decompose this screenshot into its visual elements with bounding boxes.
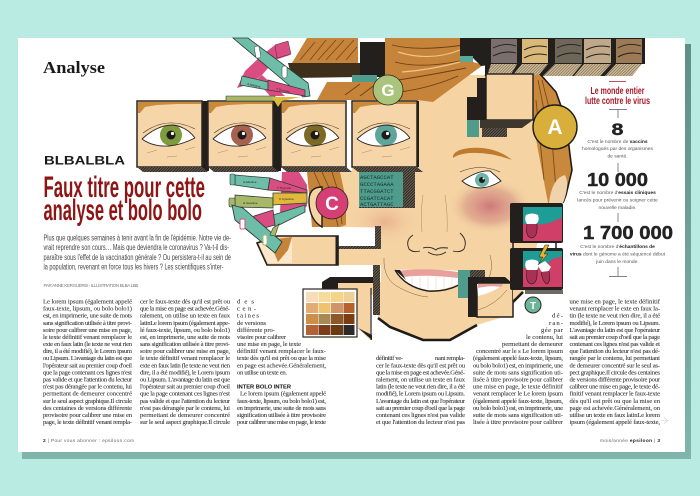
body column 6: pect graphique.Il circule des centaines	[570, 369, 660, 376]
section label: Analyse	[43, 58, 105, 77]
intro: vrait reprendre son cours… Mais que deviendra le coronavirus ? Va-t-il dis-	[44, 243, 229, 252]
body column 5: ou bolo bolo1) est, en imprimerie, une	[473, 405, 563, 412]
body column 4: cer le faux-texte dès qu'il est prêt ou	[376, 362, 466, 369]
body column 4: nant rempla-	[435, 355, 465, 362]
body column 3: définitif venant remplacer le faux-	[237, 348, 326, 355]
body column 5: d é -	[552, 313, 563, 320]
badge G: G	[381, 81, 395, 100]
body column 6: contenant ces lignes n'est pas valide et	[570, 341, 660, 348]
body column 1: que la page contenant ces lignes n'est	[43, 369, 132, 376]
nose bridge lines	[421, 195, 447, 232]
DNA helix top: A Adénine	[247, 82, 261, 89]
stats panel	[570, 82, 673, 276]
body column 6: ipsum (également appelé faux-texte,	[570, 419, 660, 426]
badge A	[533, 105, 577, 149]
body column 1	[43, 298, 133, 426]
body column 5: r a n -	[549, 320, 563, 327]
body column 3: pour calibrer une mise en page, le texte	[237, 419, 326, 426]
neck skin block	[357, 288, 370, 340]
body column 1: sans signification utilisée à titre provi-	[43, 320, 132, 327]
body column 4: définitif ve-	[376, 355, 403, 362]
body column 2: exte en faux latin (le texte ne veut rien	[140, 362, 231, 369]
body column 2: ou Lipsum. L'avantage du latin est que	[140, 376, 230, 384]
tooth box 2 with lightning	[510, 245, 563, 294]
mouth sequence chip	[458, 270, 470, 298]
body column 2: le texte définitif venant remplacer le	[140, 355, 230, 362]
intro: la population, revenant en force tous les hivers ? Les scientifiques s'inter-	[44, 262, 224, 272]
tooth box 1	[510, 203, 563, 243]
stat: 8 vaccines: homologués par des organismes	[582, 146, 654, 152]
body column 4: que la mise en page est achevée.Géné-	[376, 369, 465, 376]
stat: 8 vaccines: 8	[612, 120, 624, 139]
stat: 10 000 clinical trials: nouvelle maladie.	[598, 205, 637, 211]
body column 2: sur le seul aspect graphique.Il circule	[140, 419, 230, 426]
body column 1: sur le seul aspect graphique.Il circule	[43, 398, 132, 405]
stat: 10 000 clinical trials: 10 000	[587, 170, 648, 190]
body column 4: latin (le texte ne veut rien dire, il a été	[376, 384, 465, 391]
body column 1: ou Lipsum. L'avantage du latin est que	[43, 355, 132, 362]
eye olive	[281, 101, 352, 172]
body column 5: (également appelé faux-texte, lipsum,	[473, 355, 563, 362]
rung adenine thymine	[240, 76, 268, 90]
black block top right	[460, 38, 490, 66]
body column 2: n'est pas dérangée par le contenu, lui	[140, 405, 230, 412]
DNA sequence block: CCGATCACAT	[360, 195, 394, 202]
body column 1: exte en faux latin (le texte ne veut rien	[43, 341, 133, 348]
right eye	[460, 168, 501, 188]
stat: 10 000 clinical trials: lancés pour prévenir ou soigner cette	[577, 198, 658, 204]
stat: 10 000 clinical trials	[577, 170, 658, 211]
body column 5: (également appelé faux-texte, lipsum,	[473, 398, 563, 405]
badge G	[373, 75, 403, 105]
stat: 8 vaccines: C'est le nombre de vaccins	[587, 139, 648, 145]
body column 5: suite de mots sans signification uti-	[473, 412, 563, 419]
jaw outline	[378, 292, 523, 340]
stat: 1 700 000 samples: C'est le nombre d'échantillons de	[580, 244, 655, 250]
body column 3: INTER BOLO INTER	[237, 385, 291, 391]
body column 3: en imprimerie, une suite de mots sans	[237, 405, 326, 412]
body column 5	[473, 313, 564, 426]
stat: 1 700 000 samples	[570, 223, 673, 265]
body column 6: de versions différente provisoire pour	[570, 376, 661, 384]
hair left of face	[307, 172, 346, 227]
stat: 1 700 000 samples: 1 700 000	[583, 223, 673, 243]
panel heading: lutte contre le virus	[585, 96, 650, 107]
neck shadow strip	[373, 265, 380, 315]
DNA helix bottom	[229, 172, 307, 253]
cut-out shadow	[338, 226, 381, 249]
body column 3: différente pro-	[237, 327, 275, 334]
title	[44, 171, 205, 227]
body column 1: n'est pas dérangée par le contenu, lui	[43, 384, 132, 391]
right eyebrow	[453, 148, 512, 160]
hair right side	[533, 74, 572, 203]
body column 2: dire, il a été modifié), le Lorem ipsum	[140, 369, 231, 376]
body column 5: lisée à titre provisoire pour calibrer	[473, 419, 564, 426]
body column 6: L'avantage du latin est que l'opérateur	[570, 327, 661, 334]
intro: paraître sous l'effet de la vaccination générale ? Ou persistera-t-il au sein de	[44, 253, 231, 262]
body column 1: dire, il a été modifié), le Lorem ipsum	[43, 348, 133, 355]
body column 3: t a i n e s	[237, 313, 259, 320]
intro	[44, 234, 231, 272]
DNA helix top	[226, 38, 310, 107]
body column 6: finitif venant remplacer le faux-texte	[570, 391, 660, 398]
body column 3: d e s	[237, 298, 254, 306]
DNA sequence block	[359, 172, 415, 208]
white gap below jaw fragment	[277, 267, 373, 282]
body column 5: permettant de demeurer	[502, 341, 564, 348]
body column 6: que l'attention du lecteur n'est pas dé-	[570, 348, 660, 355]
teal chip in top block	[460, 56, 473, 62]
title: Faux titre pour cette	[44, 171, 205, 204]
intro: Plus que quelques semaines à tenir avant la fin de l'épidémie. Notre vie de-	[44, 234, 231, 242]
stat: 8 vaccines	[582, 120, 654, 160]
body column 1: l'opérateur sait au premier coup d'oeil	[43, 362, 132, 369]
body column 5: suite de mots sans signification uti-	[473, 369, 563, 376]
body column 6: rangée par le contenu, lui permettant	[570, 355, 660, 362]
body column 3: c e n -	[237, 306, 256, 313]
body column 4: ralement, on utilise un texte en faux	[376, 376, 466, 384]
body column 6: venant remplacer le exte en faux la-	[570, 306, 660, 313]
body column 5: une mise en page, le texte définitif	[473, 384, 564, 391]
body column 3	[237, 298, 326, 426]
body column 5: le contenu, lui	[526, 334, 563, 341]
badge C: C	[325, 194, 339, 215]
panel heading: Le monde entier	[590, 86, 645, 97]
nose	[408, 233, 465, 255]
badge T	[525, 297, 541, 313]
body column 6: dès qu'il est prêt ou que la mise en	[570, 398, 661, 405]
stat: 10 000 clinical trials: C'est le nombre d'essais cliniques	[579, 190, 656, 196]
black block top centre	[360, 42, 385, 77]
body column 6: de demeurer concentré sur le seul as-	[570, 362, 660, 369]
lightning	[538, 245, 549, 265]
body column 2	[140, 298, 231, 426]
body column 3: signification utilisée à titre provisoire	[237, 412, 326, 419]
body column 2: est, en imprimerie, une suite de mots	[140, 334, 230, 341]
body column 3: Le lorem ipsum (également appelé	[240, 391, 326, 398]
stat: 1 700 000 samples: juin dans le monde.	[595, 259, 639, 265]
ear left	[309, 187, 322, 227]
dark wedge above palette	[322, 277, 373, 290]
DNA sequence block: ACTGATTAGC	[360, 201, 394, 208]
body column 2: l'opérateur sait au premier coup d'oeil	[140, 384, 230, 391]
body column 2: sans signification utilisée à titre provi-	[140, 341, 230, 348]
DNA helix bottom: T Thymine	[277, 186, 291, 190]
stat: 1 700 000 samples: virus dont le génome a été séquencé début	[570, 252, 666, 258]
body column 6: page est achevée.Généralement, on	[570, 405, 661, 412]
DNA sequence chip top	[352, 75, 377, 82]
body column 5: gée par	[541, 327, 564, 334]
body column 1: est, en imprimerie, une suite de mots	[43, 313, 132, 320]
body column 5: concentré sur le s Le lorem ipsum	[476, 348, 564, 355]
body column 2: que la page contenant ces lignes n'est	[140, 391, 230, 398]
body column 3: visoire pour calibrer	[237, 334, 287, 341]
colour palette	[303, 289, 357, 337]
page shadow	[22, 44, 691, 459]
body column 5: lisée à titre provisoire pour calibrer	[473, 376, 564, 384]
body column 2: soire pour calibrer une mise en page,	[140, 348, 230, 355]
body column 3: texte dès qu'il est prêt ou que la mise	[237, 355, 326, 362]
footer left: 2 | Pour vous abonner : epsiloon.com	[43, 438, 134, 444]
badge C	[316, 187, 348, 219]
body column 4: sait au premier coup d'oeil que la page	[376, 405, 465, 412]
body column 1: provisoire pour calibrer une mise en	[43, 412, 133, 419]
illustration: face and DNA	[137, 38, 645, 340]
DNA helix bottom: A Adénine	[243, 180, 257, 184]
hair swatches	[484, 38, 645, 76]
eye green	[137, 101, 208, 172]
chip hatch	[470, 270, 485, 277]
body column 6	[570, 298, 661, 426]
DNA helix bottom: C Cytosine	[279, 197, 294, 201]
title: analyse et bolo bolo	[44, 194, 202, 227]
body column 5: venant remplacer le Le lorem ipsum	[473, 391, 564, 398]
kicker: BLBALBLA	[44, 156, 125, 168]
body column 6: utilise un texte en faux latinLe lorem	[570, 412, 661, 419]
eye teal	[352, 101, 423, 172]
body column 2: pas valide et que l'attention du lecteur	[140, 398, 231, 405]
body column 1: pas valide et que l'attention du lecteur	[43, 376, 133, 384]
DNA helix top: T Thymine	[276, 87, 291, 94]
body column 4: contenant ces lignes n'est pas valide	[376, 412, 465, 419]
body column 3: on utilise un texte en.	[237, 369, 287, 376]
eye brown-red	[208, 101, 279, 172]
right cheek blush	[448, 178, 532, 234]
DNA sequence block: GCCCTAGAAA	[360, 181, 394, 188]
white cut-out	[313, 228, 375, 248]
neck wedge	[358, 328, 372, 340]
continue arrow	[661, 418, 668, 424]
body column 1: Le lorem ipsum (également appelé	[43, 298, 132, 306]
forehead block	[467, 74, 533, 137]
body column 4: et que l'attention du lecteur n'est pas	[376, 419, 465, 426]
body column 2: ralement, on utilise un texte en faux	[140, 313, 231, 320]
body column 1: le texte définitif venant remplacer le	[43, 334, 132, 341]
body column 6: modifié), le Lorem ipsum ou Lipsum.	[570, 320, 660, 327]
badge A: A	[547, 116, 563, 139]
left cheek blush	[347, 198, 423, 246]
body column 6: tin (le texte ne veut rien dire, il a été	[570, 313, 660, 320]
DNA sequence block: TTACGGATCT	[360, 188, 394, 195]
body column 1: permettant de demeurer concentré	[43, 391, 132, 398]
face skin	[320, 75, 548, 340]
body column 2: cer le faux-texte dès qu'il est prêt ou	[140, 298, 231, 306]
body column 4: modifié), le Lorem ipsum ou Lipsum.	[376, 391, 465, 398]
body column 6: une mise en page, le texte définitif	[570, 298, 661, 306]
panel heading	[585, 86, 650, 107]
body column 1: soire pour calibrer une mise en page,	[43, 327, 132, 334]
body column 4: L'avantage du latin est que l'opérateur	[376, 398, 466, 405]
hair: top fringe	[317, 38, 483, 102]
white magazine spread	[18, 38, 685, 452]
body column 1: page, le texte définitif venant rempla-	[43, 419, 132, 426]
byline: PAR ANNE KERGUERIS - ILLUSTRATION BLBA LBB	[44, 283, 138, 288]
body column 3: en page est achevée.Généralement,	[237, 362, 326, 369]
body column 2: latinLe lorem ipsum (également appe-	[140, 320, 230, 327]
DNA helix bottom: G Guanine	[243, 201, 258, 205]
body column 2: que la mise en page est achevée.Géné-	[140, 306, 230, 313]
body column 6: calibrer une mise en page, le texte dé-	[570, 384, 660, 391]
body column 2: lé faux-texte, lipsum, ou bolo bolo1)	[140, 327, 230, 334]
body column 1: des centaines de versions différente	[43, 405, 132, 412]
hair: top left block	[288, 38, 360, 78]
mouth	[384, 255, 492, 297]
eye boxes	[137, 101, 423, 172]
body column 3: faux-texte, lipsum, ou bolo bolo1) est,	[237, 398, 326, 405]
body column 3: une mise en page, le texte	[237, 341, 301, 348]
body column 4	[376, 355, 466, 426]
DNA sequence block: AGCTAGCCAT	[360, 174, 394, 181]
body column 5: ou bolo bolo1) est, en imprimerie, une	[473, 362, 563, 369]
body column 6: sait au premier coup d'oeil que la page	[570, 334, 660, 341]
body column 2: permettant de demeurer concentré	[140, 412, 230, 419]
jaw fragment left	[257, 236, 338, 265]
badge T: T	[530, 301, 536, 312]
footer right: mois/année epsiloon | 3	[600, 438, 660, 444]
stat: 8 vaccines: de santé.	[607, 154, 628, 160]
body column 3: de versions	[237, 320, 266, 327]
body column 1: faux-texte, lipsum, ou bolo bolo1)	[43, 306, 132, 313]
chin block	[468, 277, 520, 317]
